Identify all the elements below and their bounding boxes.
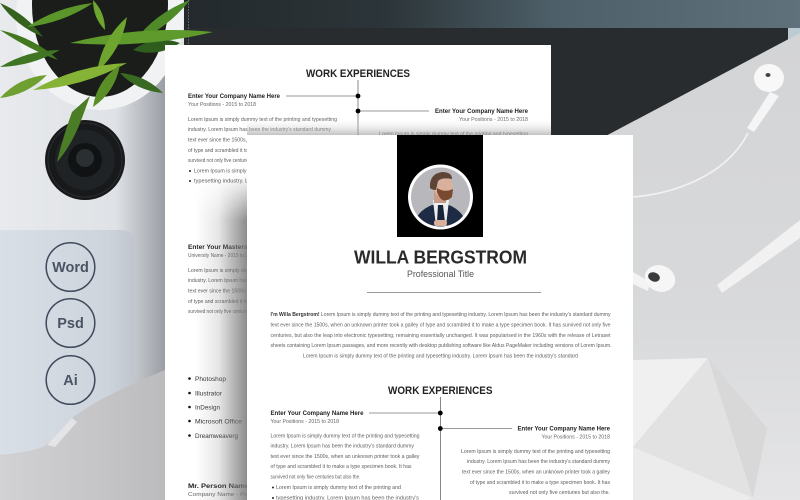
chart: back timeline: [286, 80, 429, 136]
text block: back education: Enter Your Masters Degree Here: [188, 244, 288, 251]
text block: front left job: Lorem Ipsum is simply dummy text of the printing and typesetting: [270, 434, 420, 440]
text block: back left job: Lorem Ipsum is simply dummy text of the printing and typesetting: [188, 117, 337, 123]
badge: Ai: Ai: [63, 373, 78, 389]
text block: back education: industry. Lorem Ipsum has been the industry's standard dummy: [188, 278, 331, 284]
panel: front resume page: [247, 135, 633, 500]
text block: back right job: Enter Your Company Name Here: [435, 108, 528, 115]
list: skills: [188, 376, 242, 440]
list: skills: Microsoft Office: [195, 418, 242, 426]
text block: back left job: Your Positions - 2015 to 2018: [188, 102, 256, 108]
list: skills: Photoshop: [195, 376, 226, 383]
text block: back left job: Lorem Ipsum is simply dummy text of the printing and: [194, 168, 319, 174]
text block: back left job: [188, 93, 337, 184]
text block: back reference: Mr. Person Name Here: [188, 483, 268, 490]
badge: Ai: [46, 356, 95, 404]
text block: front right job: text ever since the 1500s, when an unknown printer took a galley: [462, 470, 610, 476]
list: skills: Illustrator: [195, 390, 223, 398]
text block: back right job: Your Positions - 2015 to 2018: [459, 117, 528, 123]
badge: Word: [46, 243, 95, 291]
panel: back resume page: [165, 45, 551, 500]
text block: intro paragraph: text ever since the 1500s, when an unknown printer took a galley of type and scrambled it to make a type specimen book. It has survived not only five: [270, 322, 611, 328]
list: skills: InDesign: [195, 404, 220, 412]
text block: back right job: [379, 108, 528, 138]
text block: front left job: text ever since the 1500s, when an unknown printer took a galley: [270, 454, 420, 460]
shadow: front page on back page: [203, 178, 247, 500]
text block: back education: Lorem Ipsum is simply dummy text of the printing and typesetting: [188, 268, 337, 274]
text block: intro paragraph: I'm Willa Bergstrom! Lorem Ipsum is simply dummy text of the printing and typesetting industry. Lorem Ipsum has been the industry's standard dummy: [270, 312, 611, 318]
chart: front timeline: [369, 397, 512, 500]
title: candidate name: WILLA BERGSTROM: [354, 248, 527, 268]
text block: front right job: Enter Your Company Name Here: [518, 426, 610, 432]
text block: front right job: Your Positions - 2015 to 2018: [542, 434, 610, 440]
text block: intro paragraph: [270, 312, 612, 360]
text block: back education: University Name - 2015 to 2018: [188, 253, 256, 259]
text block: intro paragraph: centuries, but also the leap into electronic typesetting, remaining essentially unchanged. It was popularised in the 1960s with the release of Letraset: [270, 333, 611, 339]
text block: intro paragraph: Lorem Ipsum is simply dummy text of the printing and typesetting industry. Lorem Ipsum has been the industry's standard: [303, 354, 578, 360]
text block: front right job: industry. Lorem Ipsum has been the industry's standard dummy: [467, 459, 610, 465]
icon: plant pot: [16, 0, 184, 110]
text block: front left job: industry. Lorem Ipsum has been the industry's standard dummy: [270, 444, 414, 450]
text block: back reference: Company Name - Position: [188, 492, 263, 498]
text block: back left job: Enter Your Company Name Here: [188, 93, 280, 100]
text block: back education: text ever since the 1500s, when an unknown printer took a galley: [188, 288, 337, 294]
badge: Word: Word: [52, 260, 89, 276]
text block: front right job: [461, 426, 610, 496]
text block: back left job: survived not only five centuries but also the.: [188, 158, 278, 164]
background: white notebook: [600, 33, 800, 500]
icon: camera lens: [45, 96, 125, 200]
text block: back right job: Lorem Ipsum is simply dummy text of the printing and typesetting: [379, 132, 528, 138]
subtitle: professional title: Professional Title: [407, 269, 474, 280]
text block: intro paragraph: sheets containing Lorem Ipsum passages, and more recently with desktop publishing software like Aldus PageMaker including versions of Lorem Ipsum.: [270, 343, 612, 349]
text block: front right job: Lorem Ipsum is simply dummy text of the printing and typesetting: [461, 449, 610, 455]
text block: back education: survived not only five centuries but also the.: [188, 309, 278, 315]
icon: paper pyramid: [633, 358, 767, 500]
icon: earbud top: [633, 64, 784, 197]
icon: plant leaves: [0, 0, 213, 107]
background: dark folder: [165, 0, 800, 500]
text block: front left job: Your Positions - 2015 to 2018: [270, 419, 339, 425]
text block: front left job: [270, 410, 420, 500]
background: desk surface: [0, 0, 165, 500]
list: skills: Dreamweaverg: [195, 433, 238, 440]
text block: front right job: survived not only five centuries but also the.: [509, 490, 610, 496]
text block: front left job: survived not only five centuries but also the.: [270, 474, 360, 480]
icon: earbud bottom: [633, 261, 679, 296]
text block: front left job: Enter Your Company Name Here: [270, 410, 364, 417]
image: portrait: [408, 164, 473, 232]
badge: Psd: Psd: [57, 316, 84, 332]
text block: back reference: [188, 483, 268, 498]
heading: back work experiences: WORK EXPERIENCES: [306, 68, 410, 80]
shadow: front page top edge: [247, 118, 551, 135]
panel: black header block: [397, 135, 483, 237]
text block: back education: of type and scrambled it to make a type specimen book. It has: [188, 299, 329, 305]
text block: front right job: of type and scrambled it to make a type specimen book. It has: [470, 480, 610, 486]
text block: front left job: of type and scrambled it to make a type specimen book. It has: [270, 464, 412, 470]
text block: front left job: Lorem Ipsum is simply dummy text of the printing and: [276, 485, 401, 491]
background: pen: [717, 220, 800, 293]
panel: tablet with format badges: [0, 230, 165, 500]
text block: back left job: of type and scrambled it to make a type specimen book. It has: [188, 148, 329, 154]
text block: back education: [188, 244, 337, 315]
text block: back left job: industry. Lorem Ipsum has been the industry's standard dummy: [188, 127, 331, 133]
heading: front work experiences: WORK EXPERIENCES: [388, 385, 492, 397]
text block: back left job: typesetting industry. Lorem Ipsum has been the industry's: [194, 178, 337, 184]
badge: Psd: [46, 299, 95, 347]
text block: back left job: text ever since the 1500s, when an unknown printer took a galley: [188, 138, 337, 144]
